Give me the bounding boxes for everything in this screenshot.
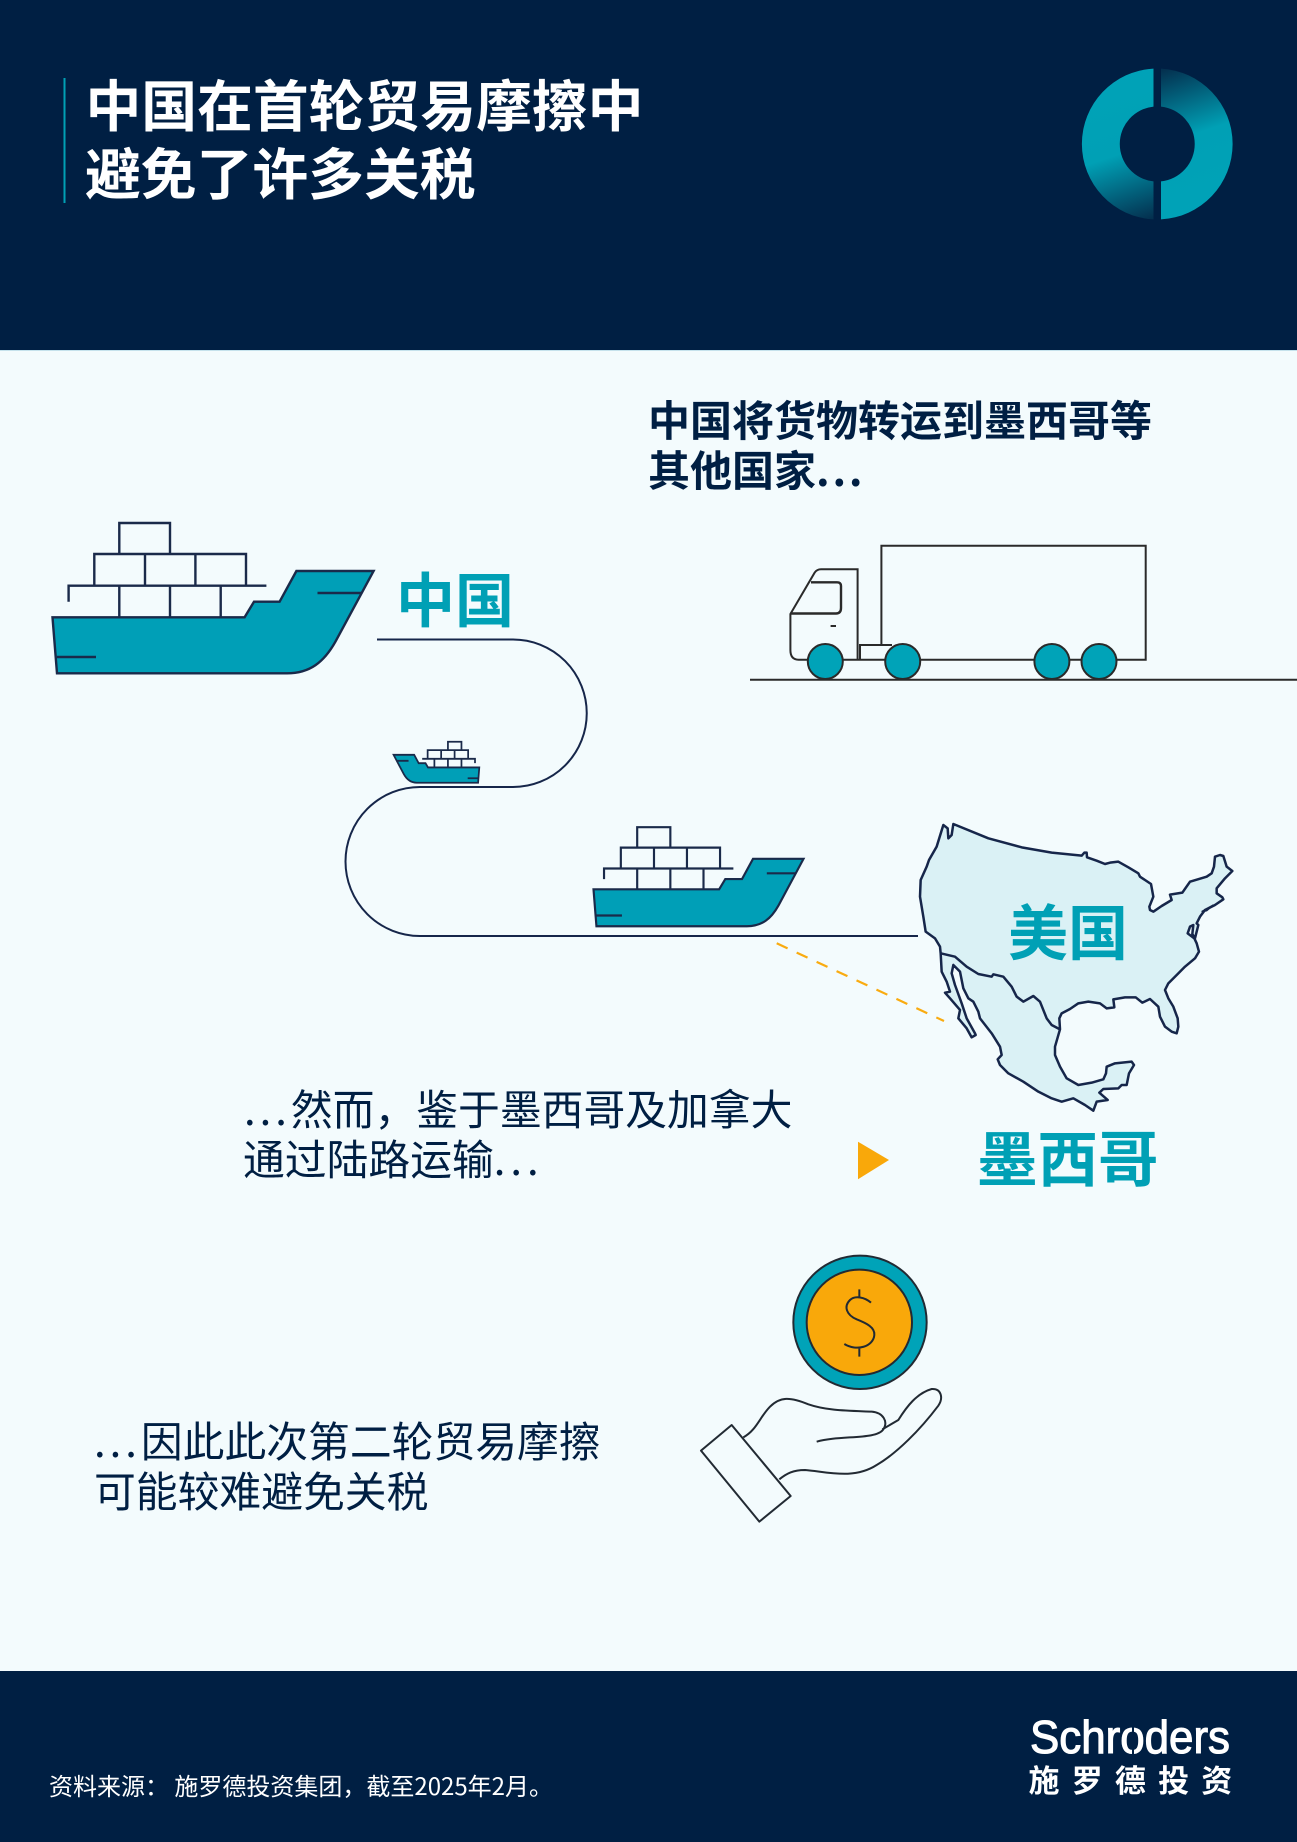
logo: Schroders wordmark xyxy=(1028,1711,1244,1801)
text block: transshipment: 其他国家... xyxy=(648,438,865,499)
source note: 资料来源： 施罗德投资集团，截至2025年2月。 xyxy=(49,1767,553,1802)
arrow: orange triangle xyxy=(858,1142,889,1179)
title: 中国在首轮贸易摩擦中 xyxy=(86,62,643,144)
text block: however land transport xyxy=(243,1078,792,1188)
text block: transshipment: 中国将货物转运到墨西哥等 xyxy=(648,388,1152,449)
route line xyxy=(346,640,918,936)
title: 避免了许多关税 xyxy=(85,130,476,212)
label: China: 中国 xyxy=(396,554,514,639)
map: USA and Mexico xyxy=(920,824,1232,1111)
logo: Schroders wordmark: 施罗德投资 xyxy=(1028,1756,1244,1801)
text block: transshipment xyxy=(648,388,1152,499)
icon: truck xyxy=(750,546,1297,680)
icon: Schroders ring logo xyxy=(1082,69,1233,219)
text block: conclusion xyxy=(94,1410,601,1520)
title accent rule xyxy=(64,78,66,203)
text block: however land transport: 通过陆路运输... xyxy=(243,1128,544,1188)
icon: small container ship xyxy=(394,742,479,783)
logo: Schroders wordmark: Schroders xyxy=(1030,1711,1230,1763)
panel: footer band xyxy=(0,1671,1297,1842)
title xyxy=(85,62,643,212)
text block: however land transport: ...然而，鉴于墨西哥及加拿大 xyxy=(244,1078,792,1138)
label: Mexico: 墨西哥 xyxy=(977,1112,1158,1199)
dashed connector xyxy=(777,943,944,1021)
icon: dollar coin xyxy=(793,1256,927,1389)
icon: open hand xyxy=(701,1389,941,1522)
icon: medium container ship xyxy=(594,827,803,926)
text block: conclusion: ...因此此次第二轮贸易摩擦 xyxy=(94,1410,601,1470)
text block: conclusion: 可能较难避免关税 xyxy=(94,1460,428,1520)
label: USA: 美国 xyxy=(1008,886,1128,973)
icon: large container ship xyxy=(52,523,374,673)
panel: header band xyxy=(0,0,1297,351)
